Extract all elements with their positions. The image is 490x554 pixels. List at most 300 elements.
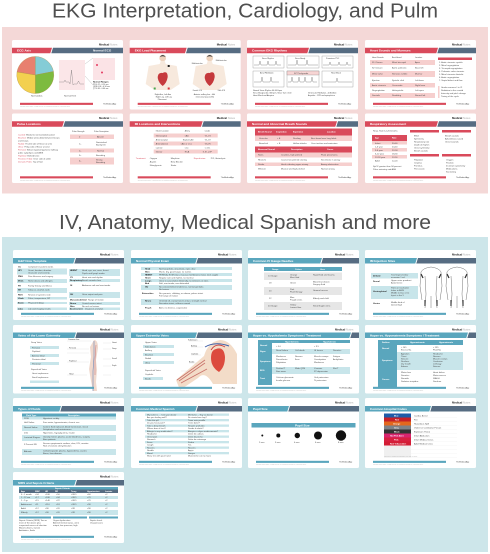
illustration: front torso: Right Arm, Left Arm	[155, 93, 172, 96]
table: heart sounds: Left apex	[415, 89, 425, 92]
chart: code colour list: Red Yellow Alert	[390, 442, 406, 445]
panel: assessment lists: Fremitus	[414, 164, 422, 168]
table: criteria: >34	[56, 496, 60, 499]
chart: code colour list: Red	[395, 419, 400, 421]
table: criteria: >38.5	[71, 496, 77, 499]
text: rhythm names: Heart Block	[331, 72, 341, 74]
table: injection sites: Palm on trochanter	[391, 286, 409, 290]
table: exam by system: PERRLA, EOM intact, mucous membranes moist, neck supple	[159, 273, 219, 276]
table: normal respiratory rate: Pulse oximetry and ABG	[373, 168, 397, 171]
table: phrases: Take this pill	[147, 419, 159, 422]
panel: assessment lists: Incentive spirometry	[446, 164, 466, 168]
table: note template left: Family history and illness	[28, 284, 52, 288]
table: sodium: Causes	[382, 379, 390, 381]
text: rhythm names: Premature PVC	[326, 57, 340, 60]
table: needle gauges: Green	[290, 282, 297, 284]
table: criteria: Lactate	[105, 490, 113, 493]
table: phrases	[145, 413, 229, 458]
table: infarct location: RCA	[185, 150, 190, 154]
panel: murmur mnemonics: 4. Pulmonic valve stenosis	[439, 70, 464, 73]
table: fluids: Isotonic fluid replaced, blood transfusion, shock	[43, 426, 89, 428]
table: note template left: Complaint in patient words	[28, 266, 53, 268]
table: potassium: Diuretics	[333, 349, 341, 352]
table: criteria: >50	[56, 493, 60, 496]
list: arm veins: Cephalic	[145, 374, 154, 376]
text: rhythm names: Normal Sinus Rhythm 60-100 bpm	[253, 89, 282, 92]
table: criteria: WBC	[35, 491, 40, 493]
table: criteria: >2	[105, 511, 108, 514]
table: phrases: Nausea	[188, 447, 196, 449]
panel: assessment lists: Chest wounds	[445, 140, 459, 144]
table: criteria: >34	[35, 493, 39, 496]
table: potassium: Normal	[260, 344, 268, 347]
table: abnormal sounds: Rales	[258, 154, 263, 156]
table: heart sounds: Ejection	[372, 79, 380, 82]
text: pulse location list	[18, 134, 60, 164]
card: Respiratory Assessment	[365, 114, 476, 183]
text: treatment: Beta Blocker	[171, 160, 183, 164]
table: potassium: Paresthesia	[276, 358, 288, 361]
table: injection sites: Deltoid	[373, 274, 381, 278]
list: arm veins: Superficial Veins	[145, 370, 161, 372]
table: note template left: Physical findings	[28, 302, 44, 304]
table: phrases: Cough	[147, 444, 154, 446]
table: exam by system: Extremities	[142, 292, 154, 295]
table: heart sounds: Right base	[415, 84, 426, 87]
card: EKG Lead Placement	[130, 40, 241, 110]
table: needle gauges: Colour	[295, 268, 302, 271]
panel: murmur mnemonics: 5. Mitral stenosis diastolic	[439, 73, 464, 76]
table: sodium: Diabetes insipidus	[401, 380, 418, 383]
table: normal respiratory rate: 18-30	[392, 154, 398, 156]
table: needle gauges: Elderly and child	[313, 298, 330, 300]
card: Normal Physical Exam: Normal Physical Exam	[136, 259, 169, 263]
footer: TheMedicalApp	[104, 386, 117, 390]
table: exam by system: No lesions	[159, 289, 169, 291]
card: Hyper vs. Hyponatremia	[365, 325, 476, 394]
illustration: leg veins: Femoral	[69, 346, 77, 350]
table: criteria: Elderly	[21, 512, 28, 514]
table: note template right: Urine output and pain	[82, 293, 103, 296]
table: phrases: Donde le duele?	[188, 428, 204, 430]
table: heart sounds: Systolic click	[392, 79, 405, 82]
card: H&P Note Template	[13, 250, 124, 320]
panel: sepsis notes: Sepsis Criteria (SIRS) Two or	[19, 519, 47, 522]
text: pulse location list: Carotid: Medial to sternocleidomastoid	[18, 134, 55, 136]
table: injection sites: Dorsal	[373, 281, 380, 283]
table: criteria: Adolescent	[21, 503, 32, 506]
table: fluids: Burns, liver disease	[43, 453, 62, 455]
table: normal respiratory rate: 24-40	[392, 146, 398, 148]
footer: Copyright Medical Notes. All rights reserved. For educational purposes only, not medical advice.	[138, 105, 189, 108]
illustration: arm and heart: Basilic	[189, 362, 195, 364]
table: sodium: < 135	[433, 346, 439, 349]
table: breath sounds: Over trachea and mainstem	[311, 142, 338, 145]
panel: assessment lists: Oxygen	[446, 160, 454, 162]
table: potassium: Fatigue	[333, 355, 341, 358]
card: Common IV Gauge Needles: Medical Notes	[335, 252, 354, 256]
table: criteria: >180	[45, 493, 51, 496]
table: exam by system: Warm, dry, good turgor, no rashes	[159, 270, 191, 273]
table: breath sounds: Bronchial	[259, 143, 268, 145]
table: note template right: Range of motion	[88, 298, 105, 302]
table: phrases: Aguja	[188, 449, 194, 452]
text: treatment	[136, 157, 225, 167]
footer: Copyright Medical Notes. All rights reserved. For educational purposes only, not medical advice.	[21, 315, 72, 318]
panel: cardiology section background	[2, 27, 488, 194]
table: infarct location: Anterolateral	[156, 142, 168, 146]
list: arm veins: Axillary	[145, 349, 153, 352]
table: heart sounds: Left base	[415, 79, 425, 82]
table: heart sounds: Sternal left	[415, 94, 426, 97]
table: potassium	[258, 340, 350, 385]
table: criteria: >38.5	[71, 503, 77, 506]
text: treatment: Nitroglycerin	[150, 164, 162, 167]
table: needle gauges: Fragile veins	[290, 300, 302, 302]
panel: sepsis notes: Organ dysfunction	[53, 519, 71, 522]
footer: Copyright Medical Notes. All rights reserved. For educational purposes only, not medical advice.	[139, 463, 190, 466]
footer: TheMedicalApp	[339, 386, 352, 390]
table: exam by system: Full range of motion	[159, 294, 179, 298]
chart: pupil scale: 2 mm	[259, 442, 265, 444]
table: note template right: Respiratory	[70, 279, 83, 282]
panel: murmur mnemonics: 2. Mitral regurgitation	[439, 64, 460, 67]
illustration: leg veins: Saph	[112, 365, 116, 367]
table: sodium: Diarrhea	[433, 381, 442, 383]
card: EKG Lead Placement: EKG Lead Placement	[135, 49, 166, 53]
table: potassium: Hypokalemia	[323, 342, 337, 344]
panel: assessment lists: Suctioning	[446, 170, 457, 174]
table: sodium: Thirst	[401, 355, 407, 358]
panel: sepsis notes: more of the above plus	[19, 522, 41, 524]
panel: sepsis notes: Blood cultures, lactate	[19, 526, 41, 530]
table: normal respiratory rate	[372, 130, 407, 171]
table: criteria: >15	[35, 499, 39, 502]
panel: assessment lists: Symmetry	[414, 138, 425, 140]
footer	[256, 312, 352, 318]
list: deep veins: Small saphenous	[32, 377, 48, 379]
footer: TheMedicalApp	[456, 386, 469, 390]
table: infarct location: V1-V4	[205, 136, 211, 138]
table: abnormal sounds: Description	[291, 148, 303, 151]
footer: Copyright Medical Notes. All rights reserved. For educational purposes only, not medical advice.	[256, 463, 307, 466]
footer: TheMedicalApp	[104, 460, 117, 464]
table: infarct location: V1-V2	[205, 140, 211, 142]
table: exam by system: Alert, no distress, cooperative	[159, 306, 188, 310]
chart: pupil scale	[252, 423, 356, 444]
card: Hyper vs. Hypokalemia: Medical Notes	[335, 328, 354, 332]
table: phrases: Are you feeling well?	[147, 416, 168, 419]
footer: Copyright Medical Notes. All rights reserved. For educational purposes only, not medical advice.	[20, 105, 71, 108]
card: Respiratory Assessment: Respiratory Assessment	[370, 122, 406, 126]
table: phrases: Sangre	[188, 453, 196, 455]
table: note template right: Skin	[70, 306, 75, 308]
footer	[373, 312, 469, 318]
table: needle gauges: Orange	[290, 274, 298, 276]
table: fluids: Normal Saline	[24, 427, 38, 429]
table: needle gauges: 20	[269, 290, 272, 292]
table: note template left: Prior illnesses and surgery	[28, 276, 54, 278]
table: note template left: Lab and imaging results	[28, 308, 51, 310]
footer: Copyright Medical Notes. All rights reserved. For educational purposes only, not medical advice.	[373, 178, 424, 182]
table: heart sounds	[370, 56, 435, 98]
table: normal respiratory rate: 30-60	[392, 143, 398, 145]
table: note template right: Head, eye, ear, nose, throat	[82, 269, 109, 272]
table: phrases: Tiene dolor?	[188, 422, 201, 424]
table: infarct location	[154, 130, 218, 154]
table: sodium: Agitation	[401, 352, 410, 356]
card: Veins of the Lower Extremity: Medical Notes	[100, 328, 119, 332]
table: fluids	[22, 414, 116, 455]
footer: TheMedicalApp	[456, 312, 469, 316]
chart: code colour list: Gray	[394, 426, 400, 429]
table: exam by system	[141, 267, 232, 310]
card: Common Hospital Codes: Common Hospital Codes	[370, 407, 407, 411]
table: potassium: Nausea	[295, 356, 303, 358]
table: abnormal sounds: Coarse low pitched snoring	[281, 158, 308, 162]
list: deep veins	[30, 342, 59, 383]
card: Hyper vs. Hyponatremia: Medical Notes	[452, 328, 471, 332]
table: phrases: Tome esta pastilla	[188, 419, 206, 422]
table: abnormal sounds: Rhonchi	[258, 160, 266, 162]
table: pulse strength: 3+	[79, 155, 82, 157]
text: treatment: Aspirin	[150, 160, 157, 164]
table: note template left: Tobacco, alcohol, work	[28, 290, 51, 292]
table: note template right: Musculoskeletal	[70, 298, 87, 302]
illustration: chest leads: intercostal space (V4)	[196, 96, 214, 98]
table: abnormal sounds: Wheeze	[258, 168, 267, 170]
table: phrases: Chest pain	[147, 435, 158, 438]
table: note template right: GI	[70, 285, 73, 287]
table: phrases: Stomach	[147, 438, 156, 441]
text: pulse location list: Popliteal: Behind knee	[18, 154, 40, 158]
panel: assessment lists: Adventitious sound	[445, 138, 464, 140]
table: infarct location: Anteroseptal	[156, 138, 168, 142]
chart: code colour list: Codes vary by hospital and organization, verify with your facility	[384, 455, 418, 458]
table: potassium: GI losses	[314, 350, 323, 352]
table: sodium: Normal	[382, 347, 390, 350]
table: needle gauges: Uses	[320, 269, 326, 271]
table: fluids: Albumin	[24, 450, 33, 453]
text: treatment: Statin	[171, 164, 177, 167]
table: injection sites: Index to ASIS	[391, 289, 405, 292]
list: arm veins: Radial	[145, 358, 152, 360]
table: note template right: Neuro	[70, 303, 77, 305]
table: phrases: Do you have pain?	[147, 422, 166, 424]
table: potassium: U waves	[314, 368, 322, 370]
table: heart sounds: Mitral valve	[372, 72, 384, 76]
table: potassium: Weakness	[314, 362, 324, 364]
panel: murmur mnemonics: Radiation to the carotid	[441, 89, 464, 92]
table: sodium: Diuretics	[401, 374, 409, 377]
table: note template left: Home doses and allergies	[28, 280, 53, 282]
table: note template left: HPI	[18, 270, 22, 272]
chart: code colour list: Infant Abduction	[414, 434, 430, 437]
table: sodium: Edema	[401, 366, 409, 368]
table: criteria: >2	[105, 503, 108, 506]
table: potassium: Calcium gluconate	[276, 376, 294, 379]
footer: Copyright Medical Notes. All rights reserved. For educational purposes only, not medical advice.	[255, 178, 306, 182]
card: Hyper vs. Hypokalemia	[248, 325, 359, 394]
footer: TheMedicalApp	[222, 460, 235, 464]
table: phrases: Dolor de cabeza	[188, 434, 204, 436]
table: breath sounds: Best heard over lung fields	[311, 137, 336, 140]
card: Pupil Size	[248, 398, 359, 468]
table: fluids: Colloid expands plasma, hypovolemia, ascites	[43, 450, 87, 452]
table: normal respiratory rate: Infant	[375, 142, 381, 145]
card: ECG Axis and Normal ECG: Medical Notes	[99, 42, 118, 46]
chart: code colour list: Orange	[393, 422, 401, 425]
chart: ECG strip: QT 0.36 - 0.44 sec	[93, 88, 109, 90]
table: heart sounds: S2 Closure	[372, 68, 383, 70]
table: fluids: D10	[24, 432, 29, 434]
panel: assessment lists: Respiratory rate	[414, 140, 430, 144]
card: Pulse Locations: Pulse Locations	[17, 122, 41, 126]
table: criteria: >11	[35, 503, 39, 506]
table: phrases: Dolor de pecho	[188, 436, 203, 438]
chart: code colour list	[384, 414, 457, 458]
table: criteria: <90	[87, 511, 91, 514]
table: breath sounds: Location	[327, 130, 336, 134]
panel: murmur mnemonics: 3. Tricuspid regurgitation	[439, 67, 463, 70]
footer	[139, 312, 235, 318]
table: injection sites: Ventrogluteal	[373, 290, 387, 293]
chart: ECG strip: Normal Ranges	[93, 82, 110, 84]
table: note template left: Onset, location, duration	[28, 269, 52, 272]
table: abnormal sounds: Musical and high pitched	[281, 168, 305, 170]
table: infarct location: Leads	[205, 130, 210, 132]
table: needle gauges: Lowest flow	[290, 306, 302, 309]
table: note template left: SH	[18, 290, 21, 292]
table: needle gauges: Blood transfusion	[313, 280, 330, 284]
illustration: leg veins	[67, 339, 117, 391]
table: criteria	[19, 487, 118, 515]
card: ECG Axis and Normal ECG	[12, 40, 123, 110]
table: phrases: Muestreme con la mano	[188, 454, 212, 458]
table: criteria: >90	[45, 511, 49, 514]
table: abnormal sounds: Harsh vibrating upper airway	[281, 163, 309, 166]
card: MI Locations and Interventions	[130, 114, 241, 183]
table: exam by system: Skin	[145, 271, 150, 273]
table: phrases: Fiebre	[188, 442, 195, 444]
table: injection sites	[371, 273, 418, 306]
table: abnormal sounds: Airway obstruction	[321, 163, 339, 166]
card: Normal and Abnormal Breath Sounds	[247, 114, 358, 183]
table: potassium: Constipation	[314, 358, 327, 361]
footer	[139, 460, 235, 466]
table: potassium: Ileus	[295, 359, 300, 361]
table: sodium	[378, 340, 463, 387]
card: Heart Sounds and Murmurs: Medical Notes	[452, 42, 471, 46]
footer: Copyright Medical Notes. All rights reserved. For educational purposes only, not medical advice.	[139, 389, 190, 392]
table: normal respiratory rate: 3-6 year	[375, 150, 383, 152]
footer	[373, 460, 469, 466]
table: needle gauges: Pink	[290, 289, 295, 291]
table: note template left: Exam	[18, 302, 24, 304]
table: fluids: Burn patients	[43, 438, 56, 441]
panel: sepsis notes: Altered mental status, urine	[53, 522, 80, 524]
text: rhythm names: Sinus Rhythm	[262, 57, 274, 60]
table: sodium: Fluid Na	[433, 350, 442, 352]
table: note template right: Pupils and lymph nodes	[82, 273, 105, 275]
footer	[20, 176, 116, 182]
table: phrases: Me llamo ... Soy su doctor	[188, 413, 213, 416]
table: exam by system: Sensation intact, reflexes normal	[159, 302, 191, 305]
table: breath sounds	[255, 128, 352, 145]
panel: assessment lists: Breath sounds	[414, 150, 428, 152]
footer: TheMedicalApp	[339, 312, 352, 316]
footer: Copyright Medical Notes. All rights reserved. For educational purposes only, not medical advice.	[373, 315, 424, 318]
table: normal respiratory rate: Rate	[392, 136, 397, 140]
list: arm veins: Basilic	[145, 378, 152, 380]
table: pulse strength: 1+	[79, 144, 82, 146]
card: Pulse Locations: Medical Notes	[99, 116, 118, 120]
table: criteria: >2	[105, 493, 108, 496]
table: sodium: Water loss	[401, 371, 411, 374]
table: sodium: > 145	[401, 346, 407, 349]
text: pulse location list: Posterior Tibial: Inner side of ankle	[18, 158, 52, 160]
illustration: arm and heart: Subclavian	[188, 340, 197, 342]
list: arm veins: Ulnar	[145, 362, 150, 364]
table: infarct location: LAD	[185, 134, 189, 138]
table: potassium: Weakness	[276, 356, 286, 358]
table: criteria: >38.5	[71, 499, 77, 502]
card: Heart Sounds and Murmurs	[365, 40, 476, 110]
panel: murmur mnemonics: Intensity and pitch change	[441, 92, 467, 95]
table: potassium: Flat T	[333, 367, 339, 370]
list: deep veins: Femoral	[32, 347, 40, 349]
table: needle gauges	[264, 267, 342, 310]
footer: Copyright Medical Notes. All rights reserved. For educational purposes only, not medical advice.	[256, 389, 307, 392]
table: injection sites: Upper outer quadrant	[391, 279, 412, 282]
chart: pupil scale: 6 mm	[315, 442, 321, 444]
table: normal respiratory rate: 12-18 year	[375, 157, 386, 159]
illustration: leg veins: Common iliac	[68, 339, 80, 341]
chart: code colour list: Infant Medical Crisis	[414, 438, 433, 441]
panel: sepsis notes: Vasopressors	[90, 522, 103, 524]
table: note template left: Meds	[18, 280, 24, 282]
footer	[20, 102, 116, 108]
card: Normal and Abnormal Breath Sounds: Medical Notes	[334, 116, 353, 120]
footer: Copyright Medical Notes. All rights reserved. For educational purposes only, not medical advice.	[373, 105, 424, 108]
text: pulse location list: Femoral: Below inguinal ligament, halfway	[18, 148, 59, 152]
list: arm veins: Upper Veins	[145, 342, 157, 344]
table: phrases: Show me with your hand	[147, 454, 171, 458]
table: sodium: Lethargy	[433, 362, 442, 366]
footer	[256, 460, 352, 466]
panel: assessment lists: Percussion	[414, 168, 425, 170]
table: potassium: Palpitation	[276, 361, 287, 364]
table: needle gauges: 22	[269, 298, 272, 300]
table: potassium: IV potassium	[314, 379, 327, 382]
table: pulse strength: Pulse Strength	[72, 130, 84, 133]
card: SIRS and Sepsis Criteria: SIRS and Sepsis Criteria	[18, 481, 54, 485]
illustration: arm and heart: Axillary	[191, 344, 197, 348]
footer: Copyright Medical Notes. All rights reserved. For educational purposes only, not medical advice.	[373, 463, 424, 466]
list: deep veins: Anterior tibial	[32, 354, 45, 357]
chart: ECG strip	[59, 58, 115, 98]
table: pulse strength	[70, 130, 114, 164]
table: sodium: Steroids	[401, 377, 409, 380]
card: Normal and Abnormal Breath Sounds: Normal and Abnormal Breath Sounds	[252, 122, 307, 126]
table: infarct location: II, III, aVF	[203, 152, 213, 154]
table: fluids: Half Saline	[24, 422, 35, 424]
illustration: leg veins: Great	[112, 341, 117, 344]
table: sodium: Dry mouth	[401, 362, 412, 366]
list: deep veins: Great saphenous	[32, 372, 48, 375]
table: note template right: Cranial nerves intact	[82, 302, 102, 305]
table: phrases: Dolor de estomago	[188, 438, 207, 441]
